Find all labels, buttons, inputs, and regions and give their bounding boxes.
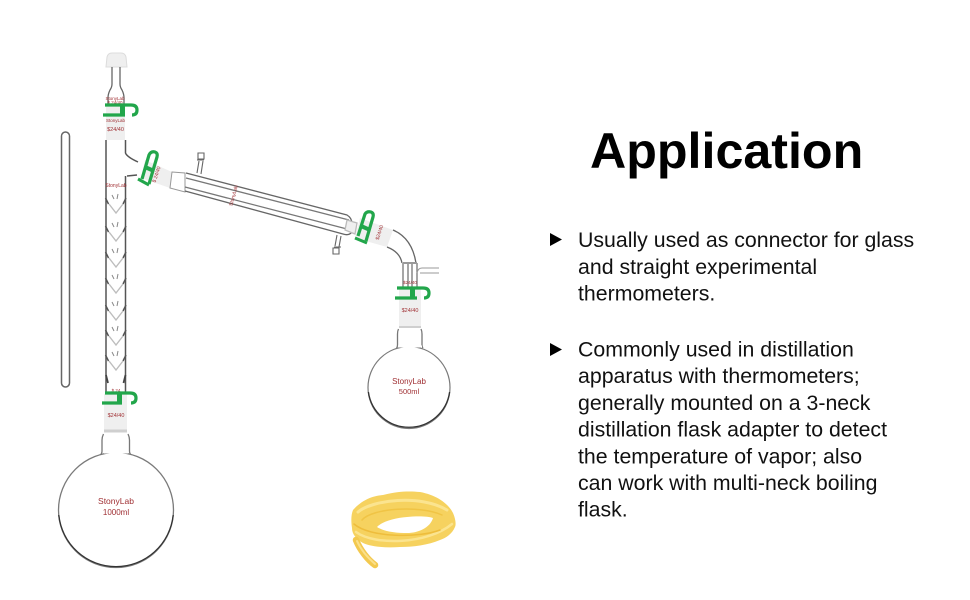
- icon: vacuum take-off adapter: $24/40: [375, 224, 385, 241]
- text block: second bullet: distillation flask adapter to detect: [578, 418, 887, 442]
- text block: second bullet: apparatus with thermometers;: [578, 364, 860, 388]
- icon: 1000ml round bottom flask: StonyLab: [98, 496, 134, 506]
- icon: fractionating column: $ 24: [112, 388, 121, 393]
- icon: lower joint: [104, 394, 127, 431]
- icon: fractionating column: StonyLab: [105, 183, 127, 189]
- icon: stopper and thermometer adapter: [105, 53, 127, 140]
- bullet arrow 2: [550, 343, 562, 356]
- icon: distillation apparatus: [58, 53, 450, 568]
- icon: lower joint: $24/40: [108, 413, 124, 419]
- icon: stopper and thermometer adapter: StonyLab: [106, 118, 126, 123]
- icon: yellow rubber tubing: [351, 491, 456, 565]
- text block: first bullet: thermometers.: [578, 282, 715, 306]
- text block: second bullet: generally mounted on a 3-neck: [578, 391, 871, 415]
- icon: lower right joint: [399, 280, 421, 326]
- icon: stopper and thermometer adapter: $24/40: [107, 127, 124, 133]
- icon: condenser: [185, 153, 352, 254]
- icon: lower right joint: $24/40: [402, 308, 418, 314]
- icon: 1000ml round bottom flask: [58, 431, 174, 568]
- title: Application: [590, 123, 863, 179]
- text block: first bullet: Usually used as connector for glass: [578, 228, 914, 252]
- icon: green clip top: [103, 104, 137, 116]
- icon: left angled joint: $ 24/40: [152, 166, 163, 184]
- icon: 1000ml round bottom flask: 1000ml: [103, 508, 129, 517]
- icon: left angled joint: [141, 160, 185, 192]
- icon: vacuum take-off adapter: [345, 218, 439, 287]
- icon: stopper and thermometer adapter: StonyLab: [105, 96, 125, 101]
- icon: lower right joint: $24/40: [403, 280, 417, 285]
- text block: second bullet: Commonly used in distillation: [578, 338, 854, 362]
- icon: green clip left: [138, 152, 157, 185]
- text block: second bullet: can work with multi-neck boiling: [578, 471, 877, 495]
- icon: 500ml round bottom flask: 500ml: [399, 387, 420, 396]
- bullet arrow 1: [550, 233, 562, 246]
- text block: second bullet: flask.: [578, 498, 628, 522]
- icon: green clip lower column: [102, 392, 136, 404]
- icon: thermometer: [62, 132, 70, 387]
- text block: second bullet: the temperature of vapor; also: [578, 444, 862, 468]
- icon: green clip right: [355, 212, 373, 243]
- icon: green clip flask: [395, 287, 429, 299]
- icon: 500ml round bottom flask: StonyLab: [392, 377, 426, 386]
- icon: condenser: StonyLab: [228, 185, 240, 207]
- icon: 500ml round bottom flask: [368, 327, 450, 428]
- icon: fractionating column: [105, 140, 138, 393]
- text block: first bullet: and straight experimental: [578, 255, 817, 279]
- icon: stopper and thermometer adapter: $ 24/40: [107, 100, 123, 105]
